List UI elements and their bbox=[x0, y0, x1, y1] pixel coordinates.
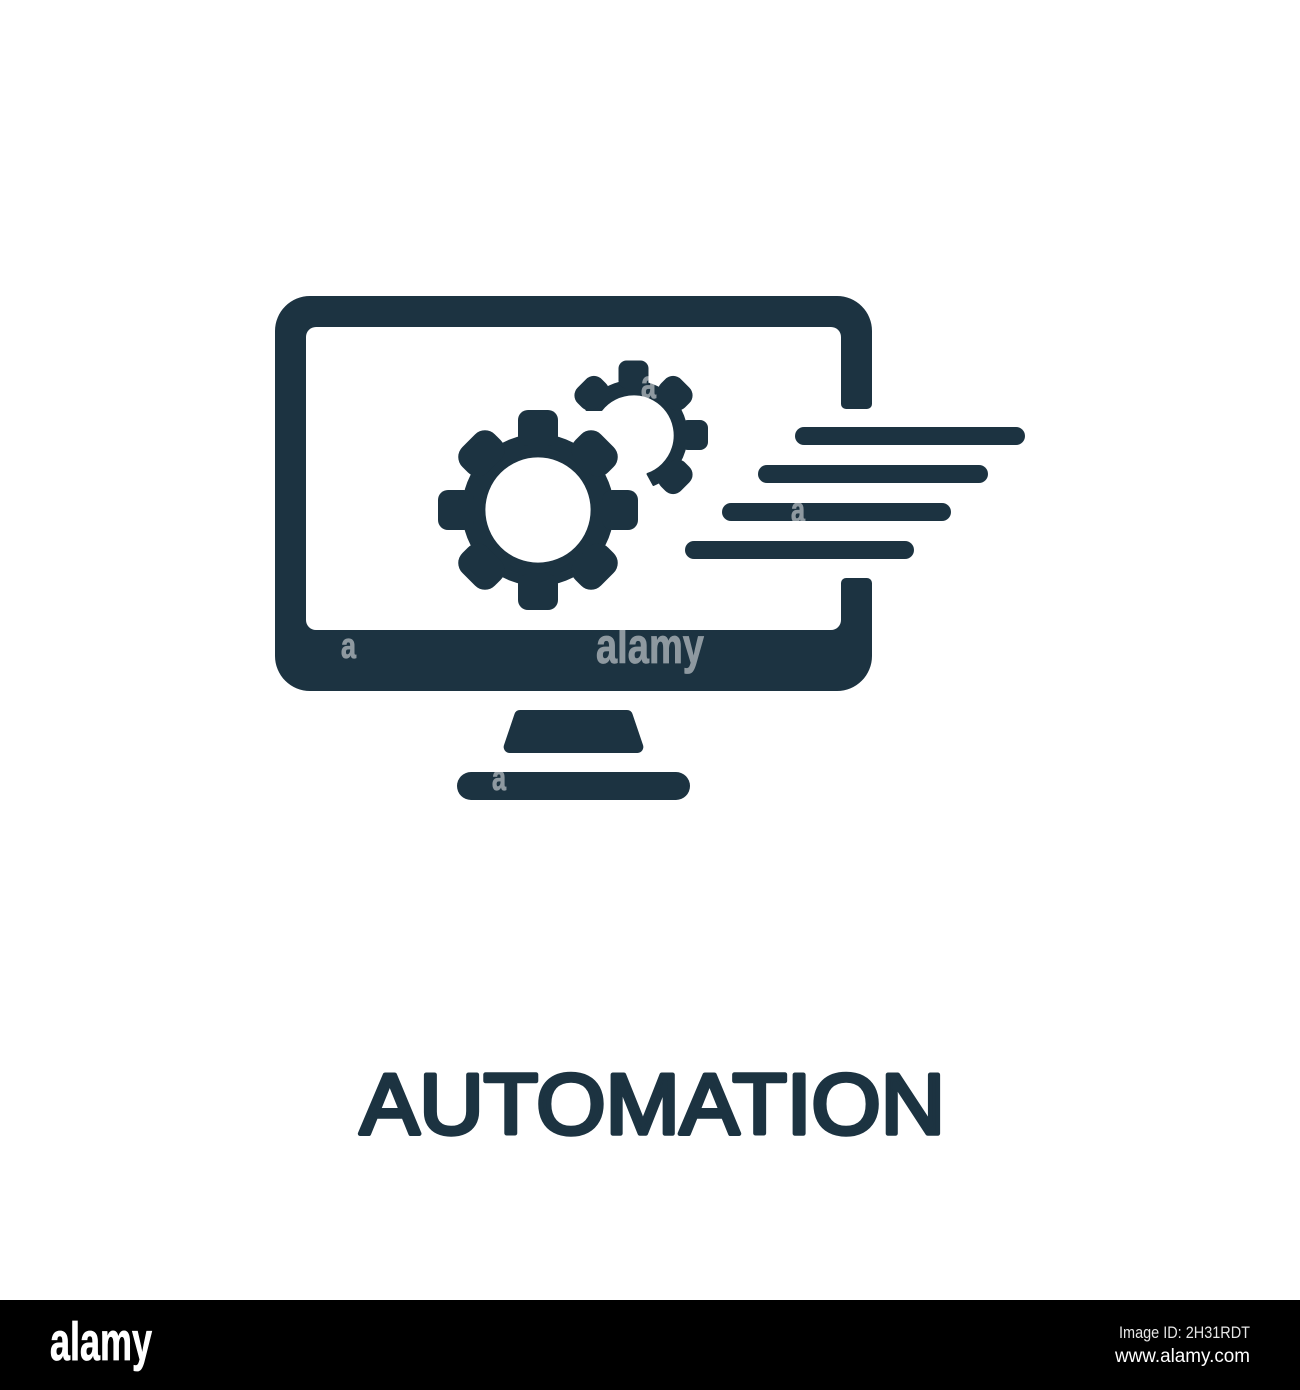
icon: small partial gear bbox=[570, 360, 708, 499]
website: www.alamy.com bbox=[1114, 1346, 1250, 1367]
watermark: a base: a bbox=[492, 757, 507, 798]
watermark: a left: a bbox=[341, 625, 357, 666]
image id: Image ID: 2H31RDT bbox=[1119, 1323, 1250, 1342]
watermark: a gear: a bbox=[641, 363, 657, 407]
icon: computer monitor with gears bbox=[275, 296, 1025, 800]
icon: large gear bbox=[438, 410, 638, 610]
watermark: a line: a bbox=[791, 489, 806, 530]
monitor stand base bbox=[457, 772, 690, 800]
speed line 3 bbox=[722, 503, 951, 521]
monitor frame bbox=[275, 296, 872, 691]
speed line 2 bbox=[758, 465, 988, 483]
speed line 4 bbox=[685, 541, 914, 559]
footer logo: alamy bbox=[50, 1312, 152, 1372]
monitor stand neck bbox=[504, 710, 643, 753]
speed line 1 bbox=[795, 427, 1025, 445]
watermark: alamy centre: alamy bbox=[596, 618, 704, 674]
footer bar bbox=[0, 1300, 1300, 1390]
watermarks bbox=[341, 363, 806, 798]
title: AUTOMATION bbox=[360, 1058, 945, 1153]
